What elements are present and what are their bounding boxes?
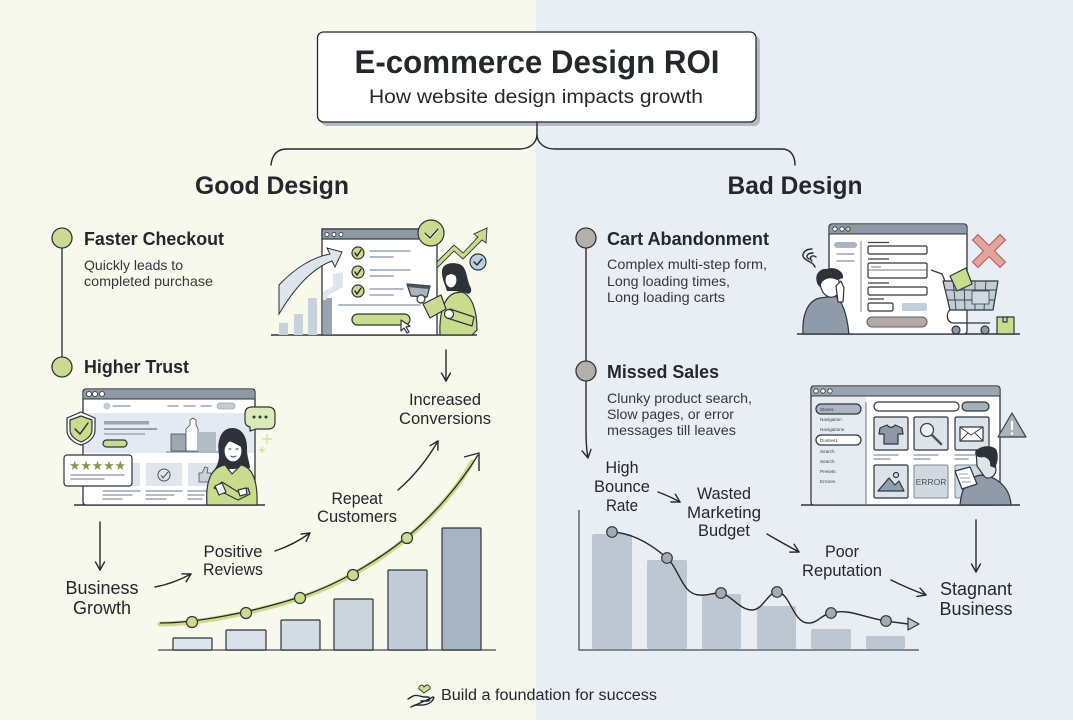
illustration: cart abandonment (797, 224, 1020, 334)
illustration: trusted store (64, 389, 275, 505)
title box (318, 32, 760, 126)
label: Repeat Customers: Repeat (332, 489, 383, 508)
arrow: trust to business growth (99, 522, 101, 570)
text: Missed Sales: Missed Sales (607, 361, 719, 382)
illustration: broken product search (801, 386, 1026, 505)
text: Cart Abandonment: Complex multi-step form, (607, 256, 767, 272)
arrow: bounce to wasted budget (658, 492, 680, 502)
arrow: budget to poor reputation (767, 534, 799, 552)
label: Poor Reputation: Poor (825, 542, 859, 561)
label: Wasted Marketing Budget: Marketing (687, 503, 761, 522)
label: Stagnant Business: Stagnant (940, 579, 1012, 599)
text: tagline: Build a foundation for success (441, 687, 657, 704)
icon: hand holding heart (408, 685, 434, 707)
label: Increased Conversions: Conversions (399, 409, 491, 428)
arrow: checkout to conversions (445, 350, 447, 381)
arrow: reviews to repeat customers (275, 533, 310, 551)
label: Repeat Customers: Customers (317, 507, 397, 526)
illustration: broken product search: Search (820, 459, 835, 464)
text: Missed Sales (607, 361, 752, 438)
label: Poor Reputation (802, 542, 882, 580)
arrow: missed sales to stagnant business (975, 520, 977, 572)
subtitle: How website design impacts growth (369, 87, 703, 108)
title: E-commerce Design ROI (354, 44, 720, 80)
label: Increased Conversions (399, 390, 491, 428)
chart: rising growth bars and curve (158, 453, 496, 650)
illustration: broken product search: Navigations (820, 427, 845, 432)
bracket connector (271, 122, 795, 165)
text: Faster Checkout: completed purchase (84, 273, 213, 289)
label: Repeat Customers (317, 489, 397, 526)
label: Wasted Marketing Budget: Wasted (697, 484, 751, 503)
text: Higher Trust: Higher Trust (84, 356, 189, 377)
illustration: broken product search: Errores (820, 479, 836, 484)
arrow: growth to reviews (155, 574, 191, 587)
label: Positive Reviews: Reviews (203, 560, 263, 579)
label: Wasted Marketing Budget (687, 484, 761, 540)
illustration: broken product search: ERROR (916, 477, 946, 487)
text: Cart Abandonment (607, 228, 769, 305)
label: Stagnant Business: Business (940, 599, 1012, 619)
label: Poor Reputation: Reputation (802, 561, 882, 580)
label: High Bounce Rate: High (606, 458, 638, 477)
text: Missed Sales: Clunky product search, (607, 390, 752, 406)
arrow: repeat customers to conversions (398, 441, 438, 490)
panel: good design background (0, 0, 536, 720)
label: Business Growth: Growth (73, 598, 131, 618)
text: Missed Sales: Slow pages, or error (607, 406, 734, 422)
label: Wasted Marketing Budget: Budget (698, 521, 750, 540)
label: Business Growth: Business (66, 578, 138, 598)
illustration: broken product search: Search (820, 449, 835, 454)
text: Faster Checkout: Faster Checkout (84, 228, 224, 249)
illustration: broken product search: Dusties1 (820, 438, 838, 443)
illustration: broken product search: Navigation (820, 417, 842, 422)
label: Increased Conversions: Increased (409, 390, 481, 409)
text: Cart Abandonment: Long loading times, (607, 273, 730, 289)
label: Business Growth (66, 578, 138, 618)
text: Missed Sales: messages till leaves (607, 422, 736, 438)
label: High Bounce Rate (594, 458, 650, 515)
good design timeline (52, 228, 72, 377)
illustration: broken product search: Presets (820, 469, 836, 474)
heading: Good Design: Good Design (195, 172, 349, 200)
text: Cart Abandonment: Cart Abandonment (607, 228, 769, 249)
text: Cart Abandonment: Long loading carts (607, 289, 725, 305)
chart: declining bars and curve (579, 510, 919, 650)
text: Faster Checkout (84, 228, 224, 289)
label: High Bounce Rate: Bounce (594, 477, 650, 496)
illustration: fast checkout (271, 220, 487, 335)
panel: bad design background (536, 0, 1073, 720)
label: Positive Reviews (203, 542, 263, 579)
heading: Bad Design: Bad Design (728, 172, 862, 200)
illustration: broken product search: Stores (820, 407, 834, 412)
footer: foundation message (408, 685, 657, 707)
label: Positive Reviews: Positive (204, 542, 262, 561)
illustration: trusted store: ★★★★★ (69, 458, 126, 473)
bad design timeline (576, 228, 596, 458)
arrow: reputation to stagnant business (891, 580, 926, 595)
text: Faster Checkout: Quickly leads to (84, 257, 183, 273)
label: High Bounce Rate: Rate (606, 496, 638, 515)
label: Stagnant Business (940, 579, 1012, 619)
